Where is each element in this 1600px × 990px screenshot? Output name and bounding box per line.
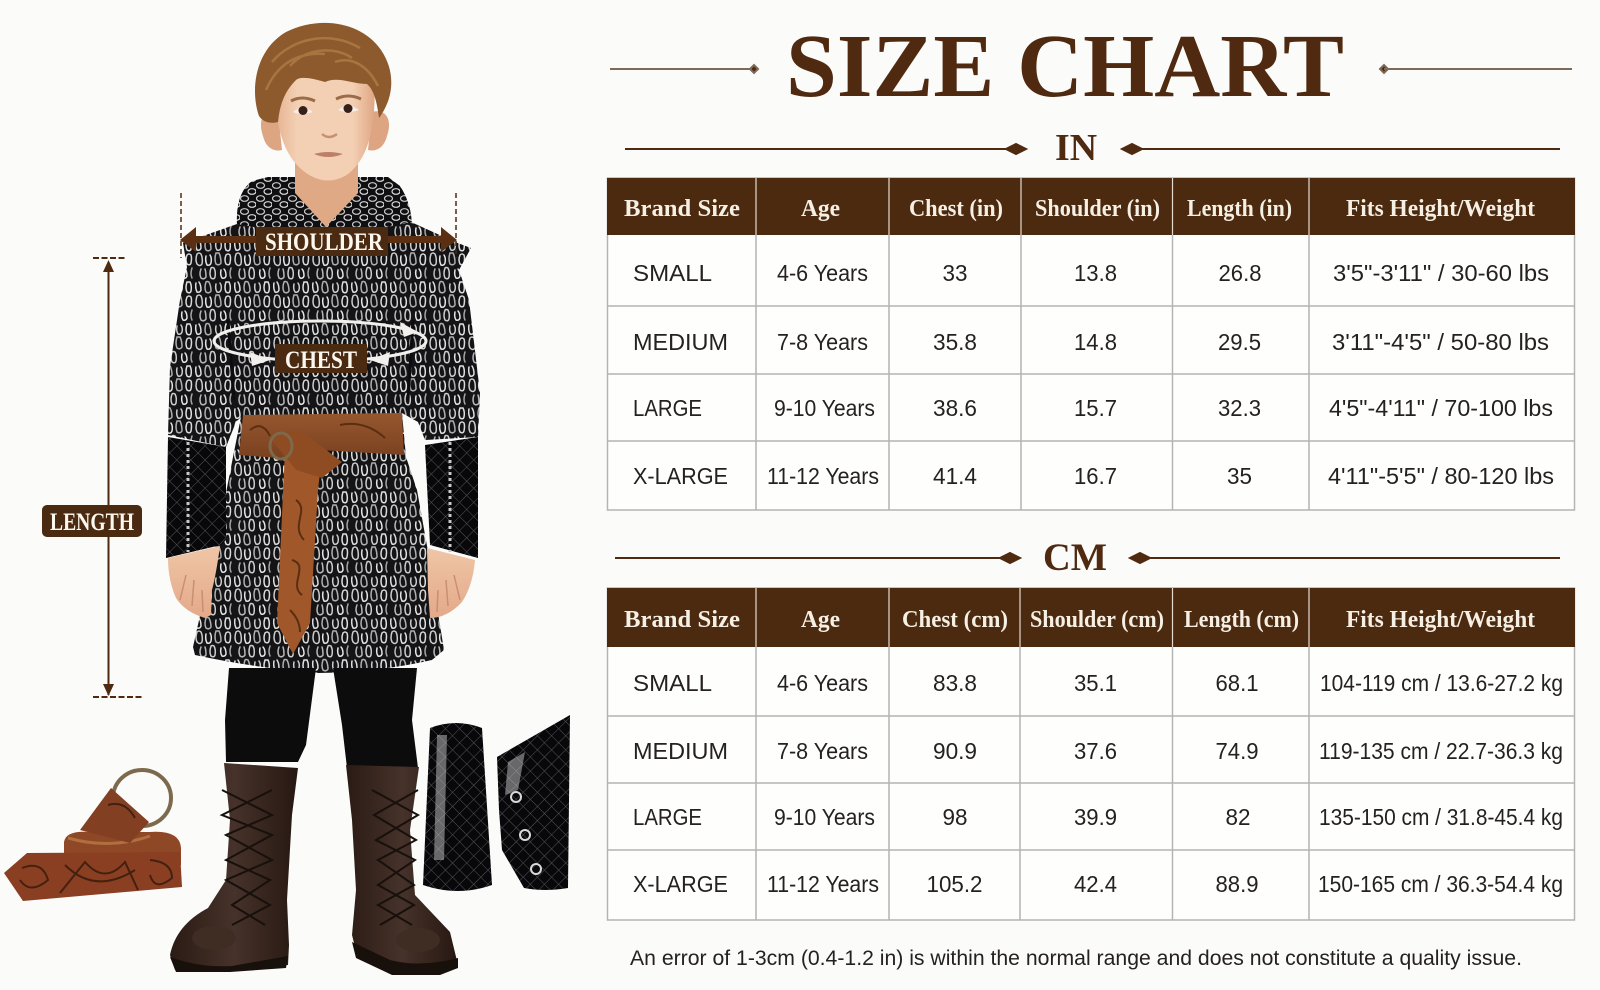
right boot: [346, 765, 458, 973]
shoulder arrow left: [180, 227, 258, 252]
row: large: 82: [1226, 804, 1250, 830]
boot laces: [222, 790, 418, 925]
right hand: [427, 548, 475, 618]
CM rule right: [1130, 553, 1560, 563]
row: x-large: 41.4: [933, 463, 977, 489]
belt flap: [80, 788, 149, 843]
header row: Fits Height/Weight: [1346, 196, 1535, 222]
row: small: 68.1: [1216, 670, 1258, 696]
right bracer: [425, 437, 478, 558]
mouth: [314, 152, 343, 157]
footnote: An error of 1-3cm (0.4-1.2 in) is within the normal range and does not constitute a quality issue.: [630, 946, 1522, 970]
header row: Shoulder (cm): [1030, 607, 1164, 633]
row: large: 32.3: [1218, 395, 1261, 421]
hair highlights: [266, 38, 378, 90]
left fingers: [180, 575, 203, 612]
length arrow heads: [103, 260, 114, 696]
title: SIZE CHART: [786, 17, 1344, 116]
row: medium: [633, 329, 1549, 355]
row: small: 35.1: [1074, 670, 1117, 696]
coiled belt: [64, 832, 181, 866]
heading: CM: CM: [1043, 536, 1107, 579]
row: small: 33: [942, 260, 968, 286]
boot toe highlights: [192, 926, 236, 950]
row: medium: 74.9: [1216, 738, 1258, 764]
row: x-large: 11-12 Years: [767, 871, 879, 897]
row: x-large: 105.2: [926, 871, 982, 897]
row: medium: MEDIUM: [633, 329, 728, 355]
irises: [298, 104, 352, 115]
row: x-large: [633, 463, 1554, 489]
row: large: 4'5"-4'11" / 70-100 lbs: [1329, 395, 1553, 421]
chest ring: [214, 321, 426, 361]
title rule left: [610, 65, 758, 73]
face: [275, 72, 375, 180]
row: x-large: 42.4: [1074, 871, 1117, 897]
measure: shoulder: [180, 193, 457, 258]
chest arrow heads: [250, 322, 418, 366]
title rule right: [1380, 65, 1572, 73]
row: small: SMALL: [633, 670, 712, 696]
chest label: [275, 344, 367, 373]
table: inches: [607, 178, 1575, 510]
row: medium: 119-135 cm / 22.7-36.3 kg: [1319, 738, 1563, 764]
row: large: [633, 395, 1553, 421]
figure: boy in chainmail costume: [166, 23, 480, 975]
CM rule left: [615, 553, 1020, 563]
header row: Age: [801, 607, 840, 633]
header row: [607, 588, 1575, 647]
shoulder arrow right: [386, 227, 457, 252]
row: large: LARGE: [633, 395, 702, 421]
hood: [237, 177, 412, 240]
row: small: 4-6 Years: [777, 260, 868, 286]
row: small: 83.8: [933, 670, 977, 696]
belt ring: [270, 433, 292, 459]
belt knot: [272, 430, 342, 478]
header row: Fits Height/Weight: [1346, 607, 1535, 633]
row: medium: 3'11"-4'5" / 50-80 lbs: [1332, 329, 1549, 355]
IN rule right: [1122, 144, 1560, 154]
row: medium: 14.8: [1074, 329, 1117, 355]
row: small: 104-119 cm / 13.6-27.2 kg: [1320, 670, 1563, 696]
table: centimetres: [607, 588, 1575, 920]
header row: [607, 178, 1575, 235]
black trousers: [225, 668, 418, 768]
table row lines: [608, 646, 1574, 920]
row: medium: 7-8 Years: [777, 738, 868, 764]
heading: IN: IN: [1055, 127, 1097, 169]
measure: shoulder: SHOULDER: [265, 229, 384, 256]
row: small: 4-6 Years: [777, 670, 868, 696]
row: x-large: [633, 871, 1563, 897]
header row: Brand Size: [624, 196, 740, 222]
row: small: [633, 670, 1563, 696]
row: small: 3'5"-3'11" / 30-60 lbs: [1333, 260, 1549, 286]
belt ring: [113, 770, 171, 826]
belt tooling: [20, 804, 172, 893]
row: x-large: X-LARGE: [633, 871, 728, 897]
neck: [295, 160, 358, 227]
accessory: leather belt: [4, 770, 182, 901]
row: medium: MEDIUM: [633, 738, 728, 764]
row: large: 9-10 Years: [774, 395, 875, 421]
row: x-large: 150-165 cm / 36.3-54.4 kg: [1318, 871, 1563, 897]
table body: [608, 178, 1574, 510]
header row: Shoulder (in): [1035, 196, 1160, 222]
measure: chest: [214, 321, 426, 374]
row: x-large: 88.9: [1216, 871, 1258, 897]
row: medium: 37.6: [1074, 738, 1117, 764]
ears: [261, 111, 389, 150]
row: medium: 29.5: [1218, 329, 1261, 355]
header row: Age: [801, 196, 840, 222]
bracer tube: [423, 723, 492, 891]
measure: length: LENGTH: [50, 509, 134, 536]
left boot: [170, 763, 298, 970]
row: small: 13.8: [1074, 260, 1117, 286]
left bracer: [166, 437, 226, 558]
header row: Length (in): [1187, 196, 1292, 222]
row: large: 9-10 Years: [774, 804, 875, 830]
row: large: 15.7: [1074, 395, 1117, 421]
length bottom tick: [93, 696, 143, 698]
brows: [291, 96, 361, 101]
row: x-large: 35: [1227, 463, 1252, 489]
header row: Length (cm): [1184, 607, 1299, 633]
bracer lacing: [188, 442, 450, 552]
row: small: [633, 260, 1549, 286]
table row lines: [608, 235, 1574, 510]
IN rule left: [625, 144, 1026, 154]
shoulder label: [256, 227, 388, 256]
row: large: [633, 804, 1563, 830]
header row: Chest (cm): [902, 607, 1008, 633]
bracer shine: [434, 735, 525, 860]
bracer eyelets: [511, 792, 541, 874]
row: large: 98: [942, 804, 968, 830]
row: large: LARGE: [633, 804, 702, 830]
accessory: bracers: [423, 715, 570, 891]
measure: chest: CHEST: [285, 347, 357, 374]
header row: Chest (in): [909, 196, 1003, 222]
row: x-large: X-LARGE: [633, 463, 728, 489]
belt hanging tail: [277, 438, 322, 654]
row: large: 39.9: [1074, 804, 1117, 830]
row: large: 135-150 cm / 31.8-45.4 kg: [1319, 804, 1563, 830]
row: x-large: 4'11"-5'5" / 80-120 lbs: [1328, 463, 1554, 489]
row: small: SMALL: [633, 260, 712, 286]
left hand: [168, 546, 220, 618]
right fingers: [437, 575, 460, 612]
eye whites: [293, 106, 359, 114]
leather belt band: [239, 413, 404, 458]
row: x-large: 16.7: [1074, 463, 1117, 489]
boot soles: [170, 942, 458, 975]
coil shading: [68, 836, 150, 844]
belt flat end: [4, 852, 182, 901]
nose: [322, 134, 337, 137]
length top tick: [93, 257, 127, 259]
row: medium: 90.9: [933, 738, 977, 764]
measure: length: [42, 258, 143, 697]
length line: [108, 268, 110, 695]
row: medium: 35.8: [933, 329, 977, 355]
row: medium: [633, 738, 1563, 764]
hair: [255, 23, 391, 123]
tunic: [168, 222, 480, 673]
shoulder dashed guides: [181, 193, 456, 258]
belt tooling: [250, 424, 385, 632]
header row: Brand Size: [624, 607, 740, 633]
row: medium: 7-8 Years: [777, 329, 868, 355]
sleeve seams: [228, 320, 413, 400]
row: large: 38.6: [933, 395, 977, 421]
length label: [42, 505, 142, 537]
row: small: 26.8: [1218, 260, 1262, 286]
table body: [608, 588, 1574, 920]
panel: model illustration: [4, 23, 570, 975]
bracer open: [497, 715, 570, 890]
row: x-large: 11-12 Years: [767, 463, 879, 489]
